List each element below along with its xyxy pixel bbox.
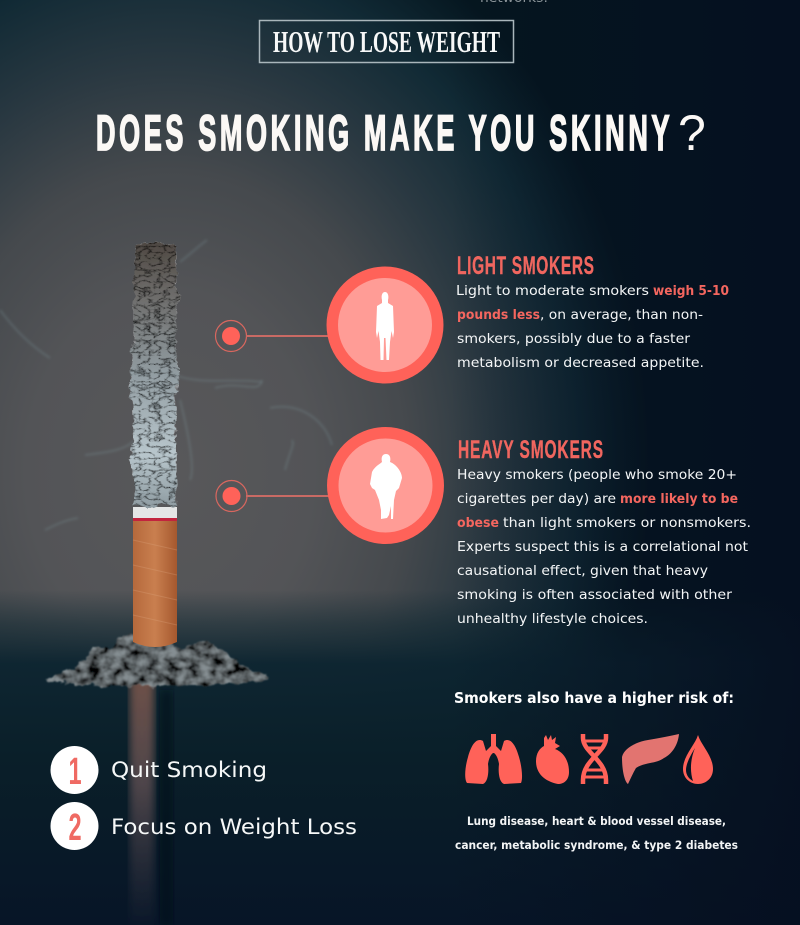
step 1: quit smoking: Quit Smoking: [111, 758, 267, 782]
section: heavy smokers: causational effect, given that heavy: [457, 563, 708, 579]
section: light smokers: pounds less: [457, 307, 540, 323]
step 2: focus on weight loss: [50, 802, 357, 850]
section: heavy smokers: more likely to be: [620, 491, 738, 507]
section: heavy smokers: Heavy smokers (people who smoke 20+: [457, 467, 737, 483]
icon: liver: [622, 734, 679, 784]
smoke wisps: [0, 240, 332, 530]
ash pile: [46, 634, 268, 688]
icon: drop: [683, 735, 713, 784]
icon: lungs: [465, 734, 522, 784]
step 1: quit smoking: 1: [68, 749, 82, 792]
icon: heart: [536, 735, 569, 784]
badge: how to lose weight: HOW TO LOSE WEIGHT: [273, 24, 500, 59]
badge: how to lose weight: [260, 20, 514, 62]
risk caption: cancer, metabolic syndrome, & type 2 diabetes: [455, 838, 738, 852]
icon: dna: [583, 734, 606, 784]
section: light smokers: , on average, than non-: [540, 307, 703, 323]
heading: higher risk: Smokers also have a higher risk of:: [454, 689, 734, 707]
section: heavy smokers: cigarettes per day) are: [457, 491, 616, 507]
section: light smokers: [456, 252, 729, 371]
risk caption: Lung disease, heart & blood vessel disease,: [467, 814, 726, 828]
step 2: focus on weight loss: Focus on Weight Loss: [111, 815, 357, 839]
icon: thin body: [326, 266, 444, 384]
section: heavy smokers: than light smokers or nonsmokers.: [503, 515, 751, 531]
section: light smokers: Light to moderate smokers: [456, 283, 649, 299]
section: heavy smokers: Experts suspect this is a correlational not: [457, 539, 748, 555]
section: heavy smokers: unhealthy lifestyle choices.: [457, 611, 648, 627]
section: heavy smokers: obese: [457, 515, 499, 531]
section: heavy smokers: [457, 436, 751, 627]
section: light smokers: LIGHT SMOKERS: [457, 252, 594, 280]
connector: light smokers: [216, 320, 330, 352]
section: light smokers: weigh 5-10: [653, 283, 729, 299]
section: heavy smokers: smoking is often associated with other: [457, 587, 732, 603]
cigarette: [130, 242, 179, 647]
section: light smokers: smokers, possibly due to a faster: [457, 331, 690, 347]
step 1: quit smoking: [50, 746, 267, 794]
section: heavy smokers: HEAVY SMOKERS: [458, 436, 603, 464]
connector: heavy smokers: [216, 480, 330, 512]
icon: heavy body: [327, 427, 444, 544]
step 2: focus on weight loss: 2: [68, 805, 82, 848]
title: ?: [678, 105, 706, 161]
risk caption: [455, 814, 738, 852]
title: DOES SMOKING MAKE YOU SKINNY: [96, 105, 670, 161]
section: light smokers: metabolism or decreased appetite.: [457, 355, 704, 371]
